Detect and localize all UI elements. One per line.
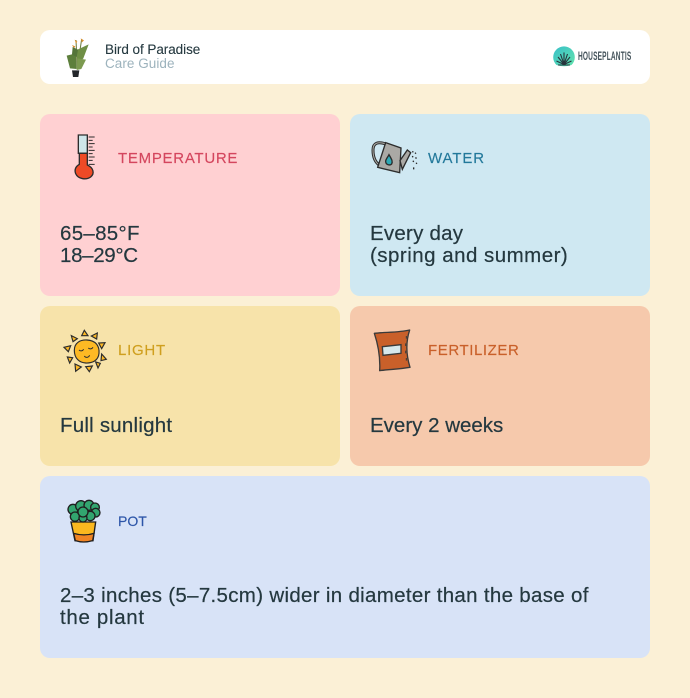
heading: light: LIGHT (118, 342, 166, 359)
icon: bird of paradise plant (66, 38, 89, 77)
heading: temperature: TEMPERATURE (118, 150, 238, 167)
heading: fertilizer: FERTILIZER (428, 342, 519, 359)
text: pot size (60, 584, 589, 629)
icon: potted plant (67, 500, 101, 543)
panel: water (350, 114, 650, 296)
text: light requirement: Full sunlight (60, 414, 172, 437)
icon: thermometer (74, 134, 95, 180)
panel: pot (40, 476, 650, 658)
text: water frequency (370, 222, 568, 267)
header bar (40, 30, 650, 84)
heading: pot: POT (118, 513, 147, 529)
text: water frequency: Every day (370, 222, 463, 245)
icon: logo mark (553, 46, 575, 66)
icon: sun (62, 329, 108, 373)
logo wordmark: HOUSEPLANTIS (578, 51, 631, 63)
panel: light (40, 306, 340, 466)
logo: houseplantis (553, 46, 631, 66)
title: plant name: Bird of Paradise (105, 42, 200, 57)
icon: fertilizer bag (374, 329, 411, 372)
heading: water: WATER (428, 150, 485, 167)
subtitle: care guide: Care Guide (105, 56, 175, 71)
panel: temperature (40, 114, 340, 296)
text: temperature range: 18–29°C (60, 244, 138, 267)
text: pot size: the plant (60, 606, 145, 629)
panel: fertilizer (350, 306, 650, 466)
text: temperature range: 65–85°F (60, 222, 140, 245)
icon: watering can (372, 141, 418, 174)
text: water frequency: (spring and summer) (370, 244, 568, 267)
text: pot size: 2–3 inches (5–7.5cm) wider in diameter than the base of (60, 584, 589, 607)
text: fertilizer frequency: Every 2 weeks (370, 414, 503, 437)
text: temperature range (60, 222, 140, 267)
